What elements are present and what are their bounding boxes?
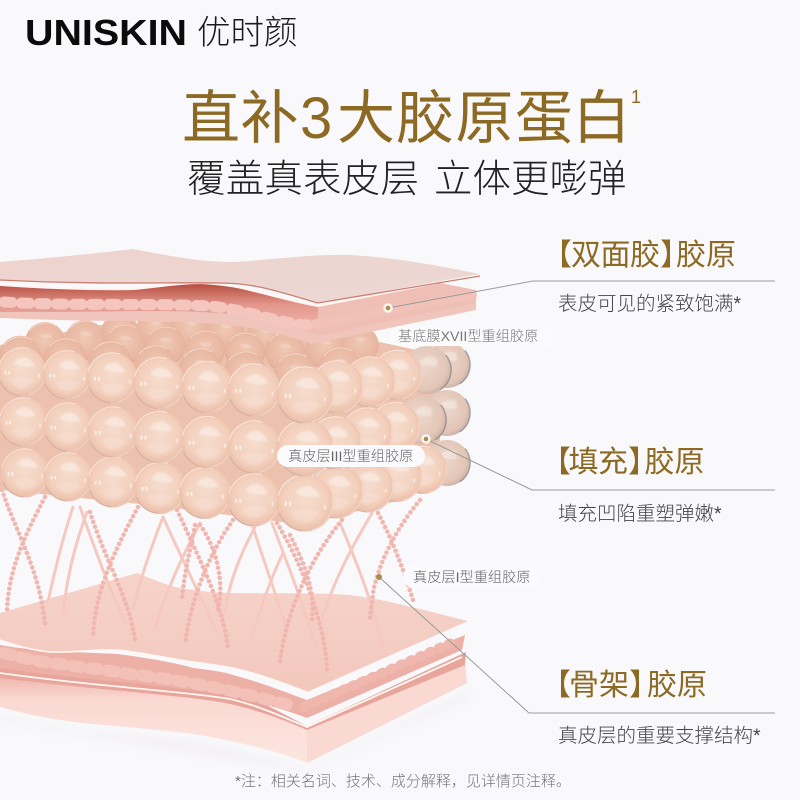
- red inner layer left: [0, 283, 318, 336]
- leader line: [388, 281, 775, 308]
- middle sheet: [0, 652, 466, 730]
- pill label: 真皮层III型重组胶原: [288, 449, 413, 465]
- top skin layers: [0, 249, 480, 344]
- callout: filler collagen: [277, 436, 775, 490]
- beaded strands: [2, 490, 420, 670]
- brand logo: UNISKIN: [25, 12, 187, 53]
- top sheet: [0, 573, 468, 692]
- brand logo: 优时颜: [197, 15, 298, 52]
- right side spheres: middle row: [308, 390, 470, 470]
- marker dot: [376, 574, 382, 580]
- brand logo: [25, 12, 298, 53]
- marker dot: [422, 436, 430, 442]
- collagen strands: [2, 490, 420, 670]
- right side spheres: bottom row: [310, 440, 470, 519]
- panel: scaffold collagen: [541, 669, 761, 747]
- pill label: [277, 445, 425, 467]
- marker dot: [384, 304, 392, 312]
- panel: filler collagen: [541, 446, 722, 525]
- heading: 【双面胶】胶原: [542, 239, 736, 272]
- title: 直补3大胶原蛋白: [182, 86, 631, 151]
- callout: scaffold collagen: [376, 566, 775, 713]
- right side spheres: top row: [310, 342, 470, 414]
- front spheres: bottom row: [1, 449, 334, 532]
- callout: basement membrane collagen: [384, 281, 775, 346]
- description: 表皮可见的紧致饱满*: [558, 293, 742, 315]
- pill label: [390, 326, 555, 346]
- bottom skin layers: [0, 573, 470, 772]
- rear spheres: upper surface: [0, 310, 379, 395]
- top sheet: [0, 249, 480, 303]
- middle thin sheet: [0, 283, 437, 306]
- lower sheet: [0, 300, 476, 344]
- bead band: [4, 302, 308, 325]
- pill label: [403, 566, 539, 588]
- footnote: *注：相关名词、技术、成分解释，见详情页注释。: [235, 773, 571, 790]
- bead layer: [0, 635, 465, 718]
- description: 真皮层的重要支撑结构*: [558, 725, 761, 747]
- heading: 【骨架】胶原: [541, 669, 707, 702]
- subtitle: 覆盖真表皮层立体更嘭弹: [187, 158, 627, 201]
- pink inner layer right: [318, 283, 476, 336]
- leader line: [379, 577, 775, 713]
- pill label: 基底膜XVII型重组胶原: [398, 329, 538, 345]
- pill label: 真皮层I型重组胶原: [413, 570, 530, 586]
- heading: 【填充】胶原: [541, 446, 704, 479]
- collagen sphere cluster: [0, 310, 470, 532]
- panel: double-sided collagen: [542, 239, 742, 315]
- description: 填充凹陷重塑弹嫩*: [558, 503, 722, 525]
- title: 1: [631, 87, 641, 107]
- cluster backing fill: [0, 325, 440, 525]
- smooth strands: [48, 507, 383, 650]
- thick bottom slab: [0, 665, 467, 763]
- front spheres: top row: [0, 348, 334, 424]
- front spheres: middle row: [0, 398, 334, 477]
- slab shadow: [0, 690, 470, 772]
- leader line: [426, 439, 775, 490]
